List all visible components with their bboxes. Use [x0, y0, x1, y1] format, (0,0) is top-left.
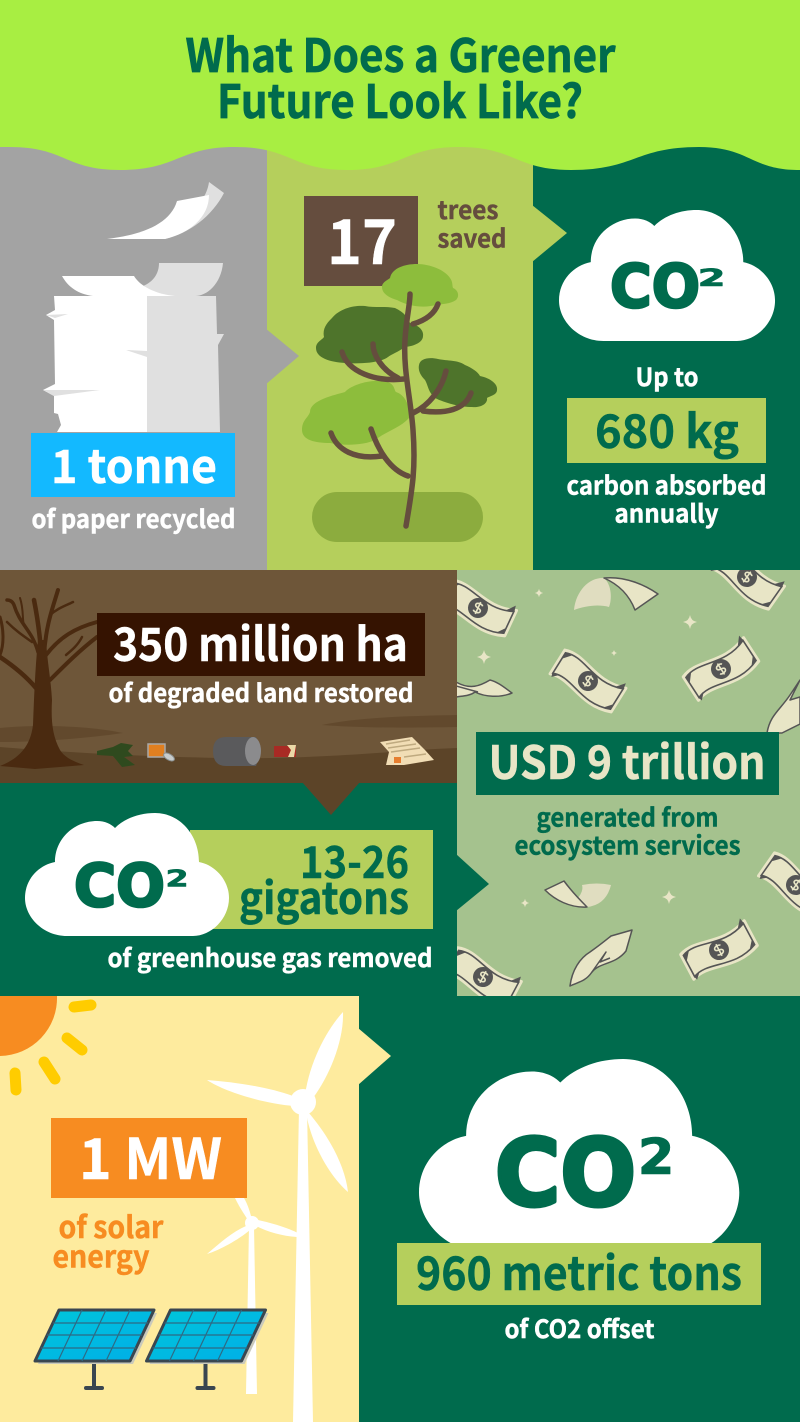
label: 960 metric tons: 960 metric tons	[416, 1238, 742, 1304]
text: carbon absorbed annually: annually	[614, 494, 719, 530]
panel: ecosystem services	[457, 570, 800, 996]
arrow: land to gas	[302, 782, 360, 815]
label: 13-26 gigatons: 13-26	[300, 827, 409, 891]
panel: degraded land	[0, 570, 457, 815]
icon: red can	[274, 745, 296, 757]
arrow: trees to carbon	[532, 205, 567, 262]
text: generated from ecosystem services: generated from	[536, 798, 718, 834]
label: 350 million ha: 350 million ha	[113, 609, 408, 675]
title: Future Look Like?	[217, 66, 583, 132]
label: 17	[304, 192, 418, 286]
panel: CO2 offset	[397, 1059, 761, 1346]
panel: carbon absorbed	[559, 210, 775, 530]
text: of paper recycled: of paper recycled	[32, 500, 236, 536]
label: 17: 17	[327, 192, 397, 282]
icon: CO2 cloud	[25, 813, 229, 936]
icon: newspaper	[380, 737, 434, 765]
header wave	[0, 0, 800, 170]
icon: small wind turbine	[207, 1198, 298, 1394]
text: generated from ecosystem services: ecosystem services	[514, 826, 740, 862]
text: of greenhouse gas removed: of greenhouse gas removed	[108, 939, 432, 975]
title: What Does a Greener	[186, 20, 616, 86]
text: generated from ecosystem services	[514, 798, 740, 862]
icon: CO2 cloud: ²	[697, 261, 726, 311]
icon: CO2 cloud: CO	[495, 1119, 636, 1227]
arrow: gas to money	[456, 854, 489, 911]
label: 13-26 gigatons	[190, 827, 433, 929]
label: 13-26 gigatons: gigatons	[239, 863, 409, 927]
text: of solar energy: of solar	[58, 1203, 164, 1247]
icon: flying money	[457, 570, 800, 996]
icon: CO2 cloud: CO	[74, 851, 165, 920]
panel: solar energy	[0, 996, 391, 1422]
icon: large wind turbine	[207, 1012, 348, 1422]
icon: CO2 cloud	[559, 210, 775, 341]
ground ellipse	[312, 492, 483, 542]
label: 680 kg: 680 kg	[595, 396, 739, 462]
arrow: paper to trees	[266, 328, 299, 385]
text: of degraded land restored: of degraded land restored	[108, 674, 414, 710]
icon: CO2 cloud: ²	[637, 1120, 675, 1224]
icon: CO2 cloud	[419, 1059, 739, 1252]
panel: greenhouse gas	[25, 813, 433, 975]
text: of CO2 offset: of CO2 offset	[504, 1310, 655, 1346]
text: carbon absorbed annually	[566, 466, 766, 530]
arrow: solar to offset	[358, 1028, 391, 1085]
icon: solar panels	[35, 1310, 268, 1388]
title	[186, 20, 616, 132]
text: up to: Up to	[636, 358, 698, 394]
text: of solar energy	[52, 1203, 164, 1276]
icon: tree	[302, 264, 497, 526]
icon: CO2 cloud: CO	[610, 252, 700, 322]
icon: tin can	[148, 744, 176, 763]
label: 1 MW: 1 MW	[79, 1115, 222, 1196]
icon: oil barrel	[213, 737, 261, 766]
icon: flying paper sheet	[107, 182, 224, 239]
text: trees saved: trees	[438, 191, 498, 227]
icon: dead tree	[0, 590, 97, 769]
panel: trees saved	[265, 140, 567, 570]
label: 1 tonne: 1 tonne	[51, 431, 217, 497]
text: trees saved	[438, 191, 506, 256]
text: of solar energy: energy	[52, 1232, 150, 1276]
icon: sun	[0, 996, 91, 1090]
text: trees saved: saved	[438, 220, 506, 256]
label: USD 9 trillion: USD 9 trillion	[488, 727, 766, 793]
icon: broken bottle	[97, 743, 135, 767]
icon: paper stack	[43, 263, 224, 432]
icon: CO2 cloud: ²	[165, 862, 189, 910]
text: carbon absorbed annually: carbon absorbed	[566, 466, 766, 502]
panel: paper recycled	[0, 140, 299, 570]
